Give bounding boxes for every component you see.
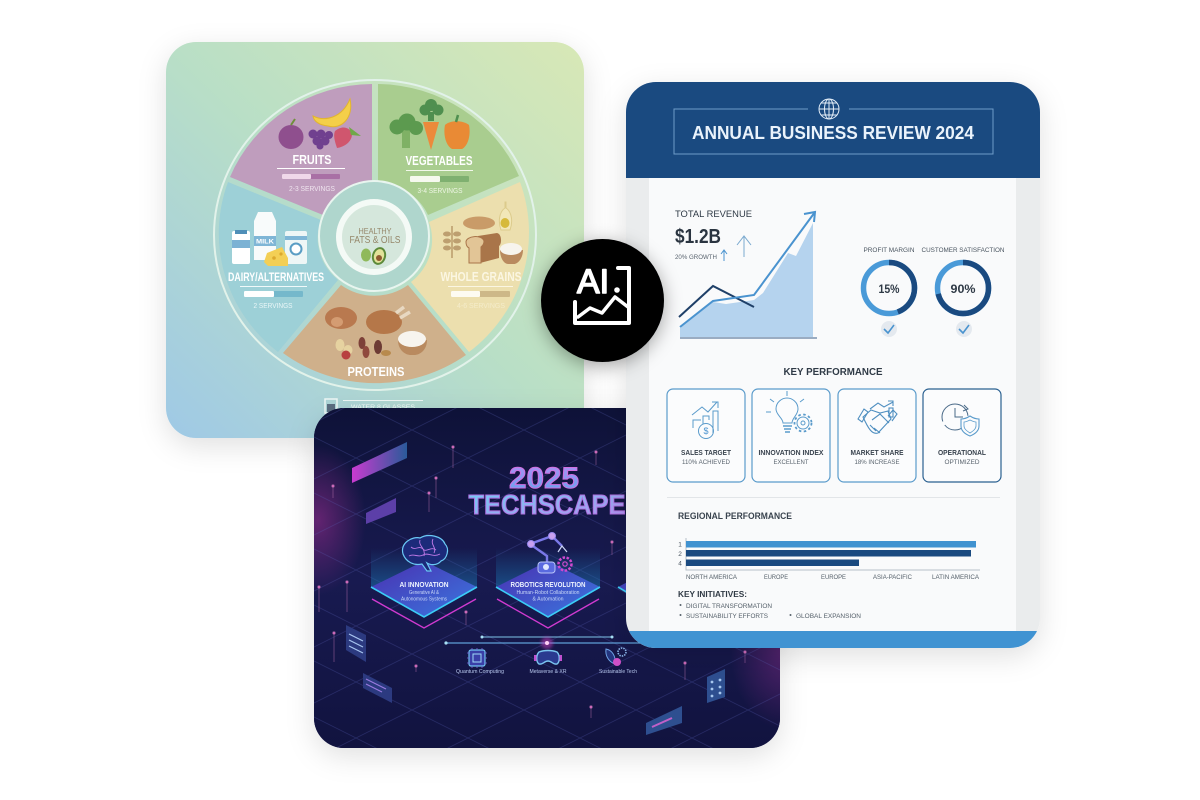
kpi: innovation index: [752, 389, 830, 482]
segment: proteins: [283, 285, 466, 383]
tech item: metaverse and XR: [530, 650, 567, 675]
tech item: quantum computing: Quantum Computing: [456, 669, 504, 675]
kpi: market share: 18% INCREASE: [854, 459, 900, 466]
center hub: healthy fats and oils: [319, 181, 429, 291]
servings bar: dairy: [244, 291, 303, 297]
water note (partly hidden): WATER 8 GLASSES: [351, 404, 416, 411]
card: AI innovation: Autonomous Systems: [401, 596, 447, 602]
kpi: innovation index: INNOVATION INDEX: [758, 450, 824, 457]
label: dairy servings: 2 SERVINGS: [254, 301, 292, 310]
bar chart: regional performance: 2: [678, 551, 682, 558]
heading: regional performance: REGIONAL PERFORMANCE: [678, 511, 792, 521]
revenue area chart: [679, 212, 817, 338]
heading: fruits: FRUITS: [292, 153, 332, 167]
bar chart: regional performance: ASIA-PACIFIC: [873, 574, 912, 581]
donut: customer satisfaction: CUSTOMER SATISFACTION: [922, 247, 1005, 254]
total revenue stat: [675, 209, 752, 261]
kpi: innovation index: EXCELLENT: [774, 459, 809, 466]
title: 2025 techscape: TECHSCAPE: [468, 489, 626, 520]
title: 2025 techscape: 2025: [509, 462, 579, 495]
card: AI innovation: [371, 536, 477, 628]
panel: 2025 techscape card: [306, 408, 788, 764]
segment: dairy/alternatives: [219, 182, 338, 352]
segment: whole grains: [411, 182, 529, 352]
total revenue stat: 20% GROWTH: [675, 254, 717, 261]
icon: brain: [403, 536, 448, 571]
kpi: operational: OPTIMIZED: [944, 459, 980, 466]
panel: annual business review card: [626, 82, 1040, 648]
donut: profit margin: PROFIT MARGIN: [864, 247, 915, 254]
icon: image frame with chart: [575, 268, 629, 323]
floating data panels: [346, 442, 725, 735]
tech item: sustainable tech: Sustainable Tech: [599, 669, 637, 675]
tech item: quantum computing: [456, 648, 504, 675]
icon: dairy: [232, 212, 307, 266]
donut: profit margin: 15%: [878, 284, 900, 296]
bar chart: regional performance: NORTH AMERICA: [686, 574, 738, 581]
text: AI: AI: [577, 263, 609, 301]
tech item: sustainable tech: [599, 648, 637, 675]
icon: check 2: [956, 321, 972, 337]
text: robotics revolution: ROBOTICS REVOLUTION: [510, 580, 586, 589]
icon: avocado: [361, 245, 388, 267]
servings bar: whole grains: [451, 291, 510, 297]
donut: customer satisfaction: 90%: [950, 284, 976, 296]
badge: AI image logo: [541, 239, 664, 362]
total revenue stat: TOTAL REVENUE: [675, 209, 752, 220]
tech item: metaverse and XR: Metaverse & XR: [530, 669, 567, 675]
total revenue stat: $1.2B: [675, 226, 721, 248]
key initiatives list: SUSTAINABILITY EFFORTS: [686, 613, 769, 620]
bar chart: regional performance: LATIN AMERICA: [932, 574, 980, 581]
title: ANNUAL BUSINESS REVIEW 2024: [692, 123, 974, 143]
icon: fruits: [278, 99, 361, 150]
servings bar: fruits: [282, 174, 340, 179]
kpi: market share: [838, 389, 916, 482]
icon: robot arm: [528, 532, 572, 573]
center hub: healthy fats and oils: FATS & OILS: [350, 235, 401, 246]
bar chart: regional performance: EUROPE: [821, 574, 847, 581]
kpi: operational: [923, 389, 1001, 482]
kpi: sales target: SALES TARGET: [681, 450, 732, 457]
text: AI innovation: AI INNOVATION: [400, 580, 448, 589]
key initiatives list: KEY INITIATIVES:: [678, 589, 747, 599]
header title box: [674, 99, 993, 154]
kpi: operational: OPERATIONAL: [938, 450, 987, 457]
bar chart: regional performance: EUROPE: [764, 574, 789, 581]
icon: dairy: MILK: [256, 238, 274, 246]
heading: vegetables: VEGETABLES: [406, 154, 472, 168]
card: robotics revolution: [496, 532, 600, 628]
kpi: sales target: [667, 389, 745, 482]
icon: vegetables: [390, 99, 470, 150]
kpi: sales target: $: [703, 426, 709, 436]
key initiatives list: DIGITAL TRANSFORMATION: [686, 603, 772, 610]
icon: proteins: [325, 307, 427, 360]
card: robotics revolution: & Automation: [532, 596, 564, 602]
panel: healthy food wheel card: [166, 42, 584, 438]
kpi: sales target: 110% ACHIEVED: [682, 459, 730, 466]
title: 2025 techscape: [468, 466, 625, 515]
timeline: [444, 636, 640, 649]
heading: proteins: PROTEINS: [348, 364, 405, 379]
icon: check 1: [881, 321, 897, 337]
card: AI innovation: Generative AI &: [409, 590, 439, 596]
label: whole grains servings: 4-6 SERVINGS: [457, 301, 505, 310]
card: robotics revolution: Human-Robot Collaboration: [516, 590, 580, 596]
segment: vegetables: [378, 84, 519, 215]
kpi: market share: MARKET SHARE: [850, 450, 904, 457]
heading: whole grains: WHOLE GRAINS: [440, 270, 522, 284]
label: fruits servings: 2-3 SERVINGS: [289, 184, 335, 193]
bar chart: regional performance: 4: [678, 560, 682, 568]
heading: dairy/alternatives: DAIRY/ALTERNATIVES: [228, 270, 324, 284]
label: vegetables servings: 3-4 SERVINGS: [418, 186, 462, 195]
water note (partly hidden): [325, 399, 423, 413]
key initiatives list: GLOBAL EXPANSION: [796, 613, 861, 620]
glowing pins: [318, 446, 746, 718]
icon: whole grains: [443, 202, 523, 264]
bar chart: regional performance: 1: [678, 542, 682, 548]
servings bar: vegetables: [410, 176, 469, 182]
donut: customer satisfaction: [922, 247, 1005, 314]
icon: globe: [819, 99, 839, 119]
bar chart: regional performance: [678, 538, 980, 581]
donut: profit margin: [864, 247, 915, 314]
text: healthy fats and oils: HEALTHY: [358, 226, 392, 236]
segment: fruits: [230, 84, 372, 215]
wheel outer ring: [214, 80, 536, 390]
card: third category (hidden): [618, 582, 626, 593]
key initiatives list: [678, 589, 861, 620]
heading: key performance: KEY PERFORMANCE: [784, 367, 883, 378]
